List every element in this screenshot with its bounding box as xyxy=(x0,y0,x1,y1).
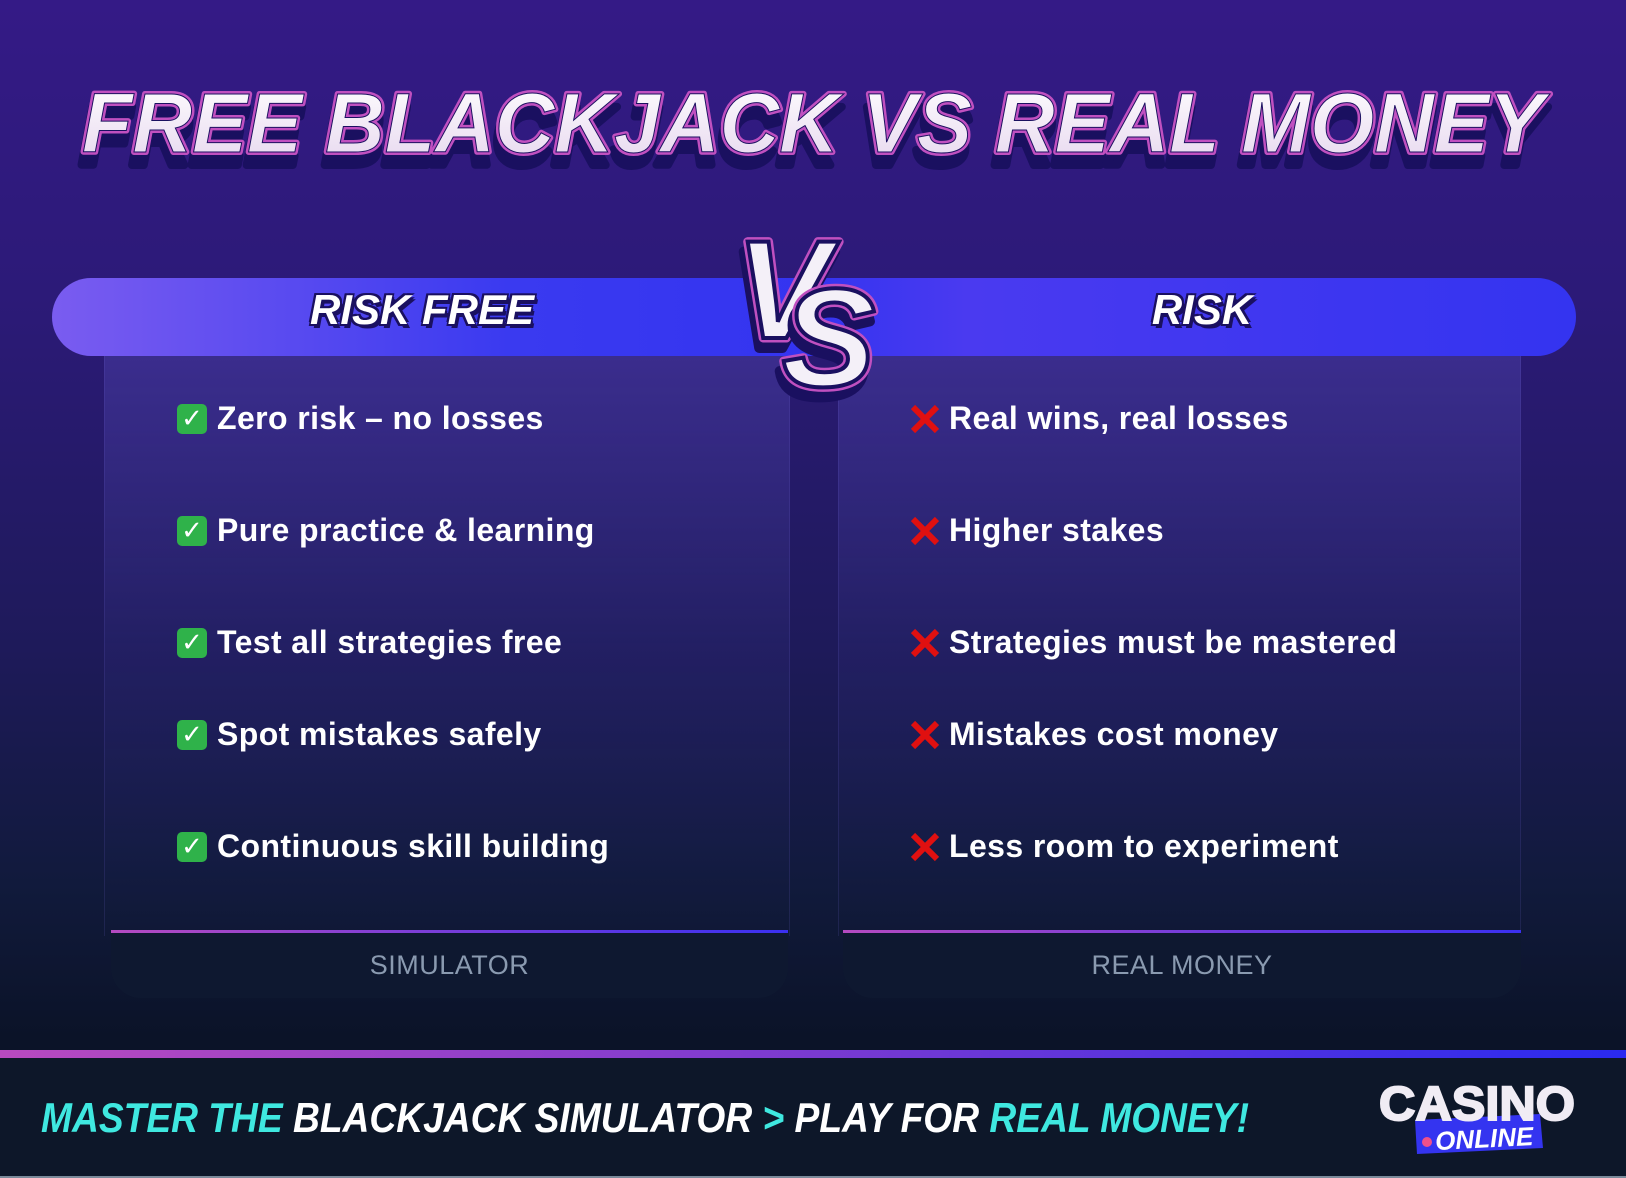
gradient stripe xyxy=(0,1050,1626,1058)
title: FREE BLACKJACK VS REAL MONEY xyxy=(82,76,1551,170)
label: simulator: SIMULATOR xyxy=(370,950,529,980)
item 2: Higher stakes xyxy=(949,512,1164,548)
item 5: Continuous skill building xyxy=(217,828,609,864)
label: simulator xyxy=(111,930,788,998)
logo: CASINO xyxy=(1379,1078,1575,1131)
title: FREE BLACKJACK VS REAL MONEY xyxy=(82,76,1551,170)
item 2: Pure practice & learning xyxy=(217,512,595,548)
item 3: Test all strategies free xyxy=(217,624,562,660)
panel: risk free xyxy=(104,356,790,936)
header bar xyxy=(52,278,1576,356)
footer xyxy=(0,1058,1626,1176)
heading: risk free: RISK FREE xyxy=(310,286,534,333)
heading: risk: RISK xyxy=(1152,286,1252,333)
item 2: ✓ xyxy=(181,516,203,546)
item 4: ✓ xyxy=(181,720,203,750)
panel: risk xyxy=(838,356,1521,936)
item 1: ✓ xyxy=(181,404,203,434)
item 1: Zero risk – no losses xyxy=(217,400,544,436)
logo: ONLINE xyxy=(1434,1121,1535,1156)
item 4: Spot mistakes safely xyxy=(217,716,542,752)
item 3: Strategies must be mastered xyxy=(949,624,1397,660)
item 5: Less room to experiment xyxy=(949,828,1339,864)
title: FREE BLACKJACK VS REAL MONEY xyxy=(80,89,1549,183)
label: real money: REAL MONEY xyxy=(1091,950,1273,980)
footer tagline: MASTER THE BLACKJACK SIMULATOR > PLAY FOR REAL MONEY! xyxy=(41,1094,1249,1141)
label: real money xyxy=(843,930,1521,998)
item 4: Mistakes cost money xyxy=(949,716,1279,752)
logo xyxy=(1379,1078,1575,1156)
item 3: ✓ xyxy=(181,628,203,658)
item 1: Real wins, real losses xyxy=(949,400,1289,436)
item 5: ✓ xyxy=(181,832,203,862)
vs badge xyxy=(732,228,878,408)
